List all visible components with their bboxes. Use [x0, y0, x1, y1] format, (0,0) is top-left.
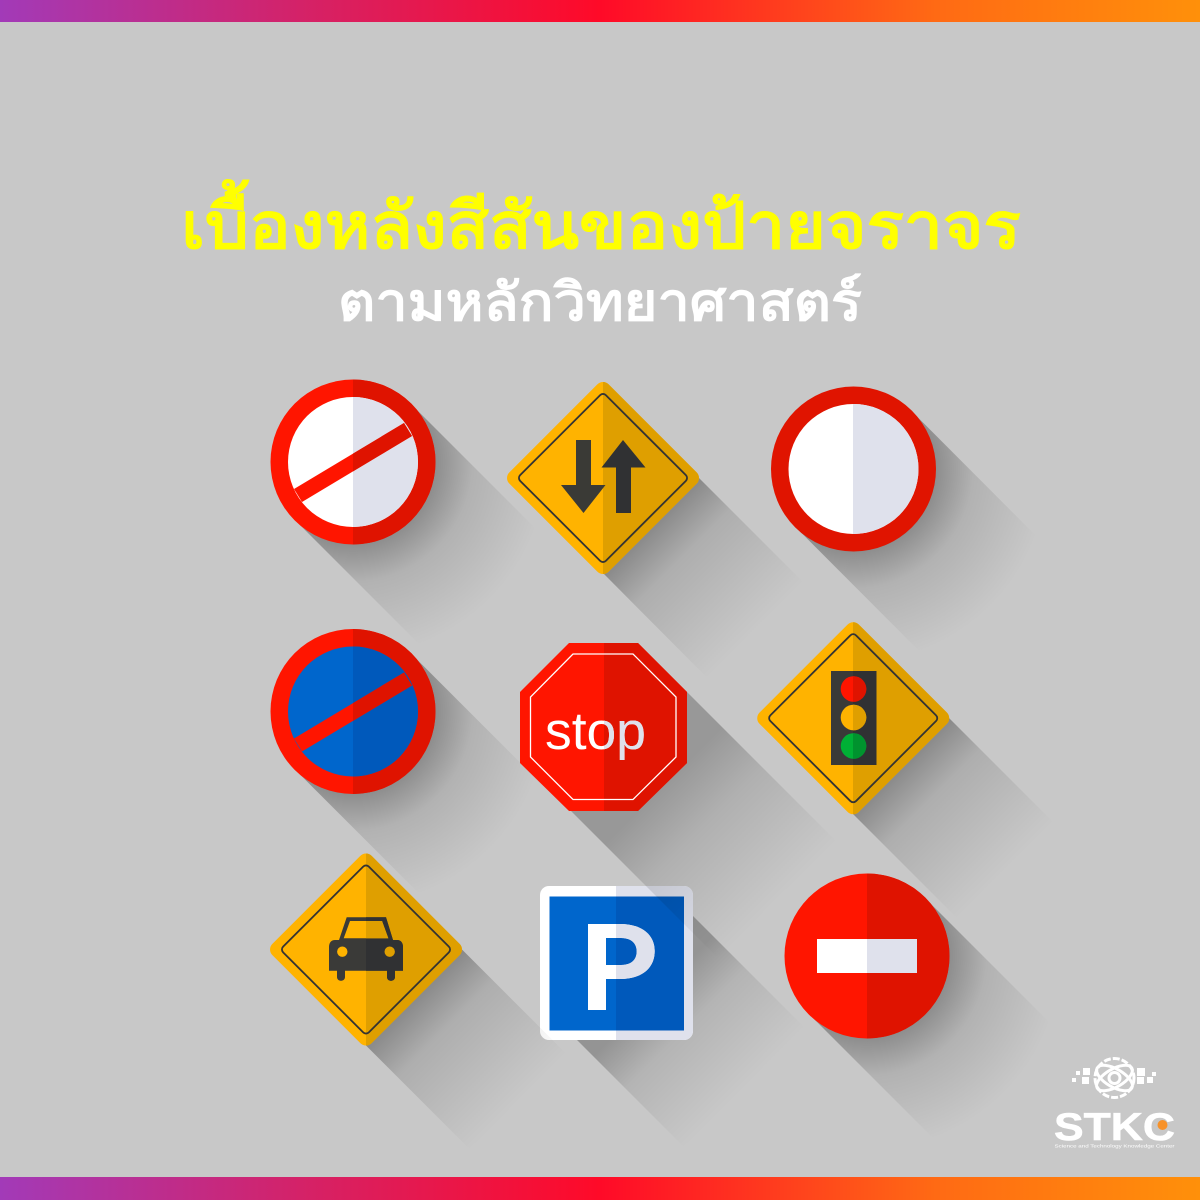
icon: letter P [588, 924, 655, 1010]
subtitle: ตามหลักวิทยาศาสตร์ [338, 274, 862, 332]
icon: atom [1093, 1058, 1136, 1098]
signs and shadows [270, 380, 1174, 1148]
sign: no parking circle [270, 629, 513, 872]
icon: car [329, 917, 403, 981]
sign: no vehicles circle [771, 386, 1013, 629]
sign: parking square [540, 886, 780, 1122]
logo wordmark: STKC [1054, 1106, 1175, 1149]
sign: car diamond [270, 854, 548, 1126]
logo: STKC [1054, 1058, 1175, 1150]
bottom gradient bar [0, 1177, 1200, 1200]
icon: traffic light [831, 671, 876, 765]
sign: stop octagon [520, 643, 810, 932]
top gradient bar [0, 0, 1200, 22]
icon: logo pixels [1072, 1068, 1156, 1084]
icon: up arrow [602, 440, 646, 513]
title: เบื้องหลังสีสันของป้ายจราจร [181, 190, 1021, 262]
icon: down arrow [561, 440, 606, 513]
sign: two-way traffic diamond [507, 382, 780, 654]
sign: no overtaking circle [270, 380, 513, 622]
logo tagline: Science and Technology Knowledge Center [1054, 1144, 1175, 1150]
stop text: stop [545, 702, 646, 761]
sign: no entry circle [784, 874, 1027, 1116]
stop text: stop [545, 702, 646, 761]
sign: traffic light diamond [757, 622, 1030, 894]
